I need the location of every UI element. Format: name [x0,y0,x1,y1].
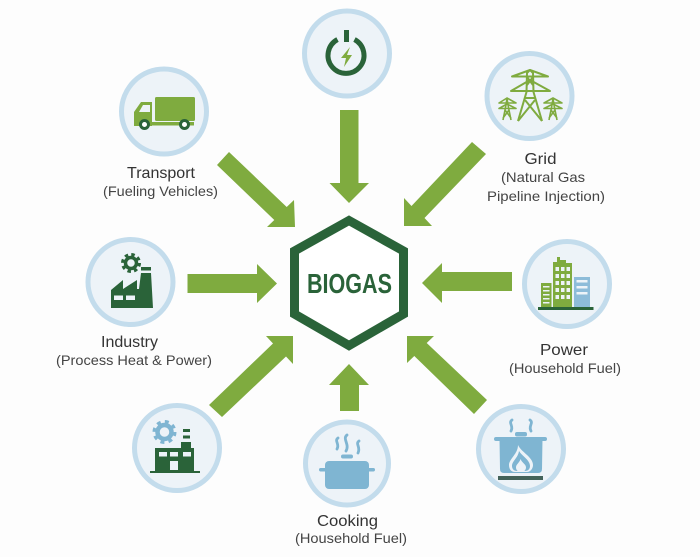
arrow: right [422,263,512,303]
label: transport: Transport [127,165,196,182]
label: industry [56,334,212,368]
label: cooking: (Household Fuel) [295,530,407,546]
icon: factory and gear [88,240,173,324]
arrow: top left [217,152,295,227]
node: industry [56,240,212,368]
node: pot with flame [478,406,564,492]
label: grid: Grid [524,151,556,168]
arrow: top right [404,142,486,226]
arrow: left [188,264,277,303]
label: cooking: Cooking [317,513,378,530]
label: power [509,342,621,376]
arrow: bottom left [209,336,293,417]
node: grid [487,54,605,204]
label: grid: Pipeline Injection) [487,188,605,204]
node: cooking [295,422,407,546]
label: transport: (Fueling Vehicles) [103,183,218,199]
label: industry: Industry [101,334,158,351]
arrow: bottom right [407,336,487,414]
arrow: bottom [329,364,369,411]
icon: truck [122,69,206,154]
label: grid: (Natural Gas [501,169,585,185]
label: transport [103,165,218,199]
label: grid [487,151,605,204]
icon: pot with steam [306,422,388,505]
label: power: (Household Fuel) [509,360,621,376]
node: power button [304,11,390,96]
arrow: top [330,110,369,203]
node: transport [103,69,218,199]
label: power: Power [540,342,589,359]
central hexagon: BIOGAS [294,220,404,346]
central hexagon: BIOGAS: BIOGAS [307,268,392,299]
icon: buildings [524,242,610,326]
label: cooking [295,513,407,546]
label: industry: (Process Heat & Power) [56,352,212,368]
node: power [509,242,621,376]
node: factory with blue gear [134,406,220,490]
icon: pylons [487,54,572,138]
